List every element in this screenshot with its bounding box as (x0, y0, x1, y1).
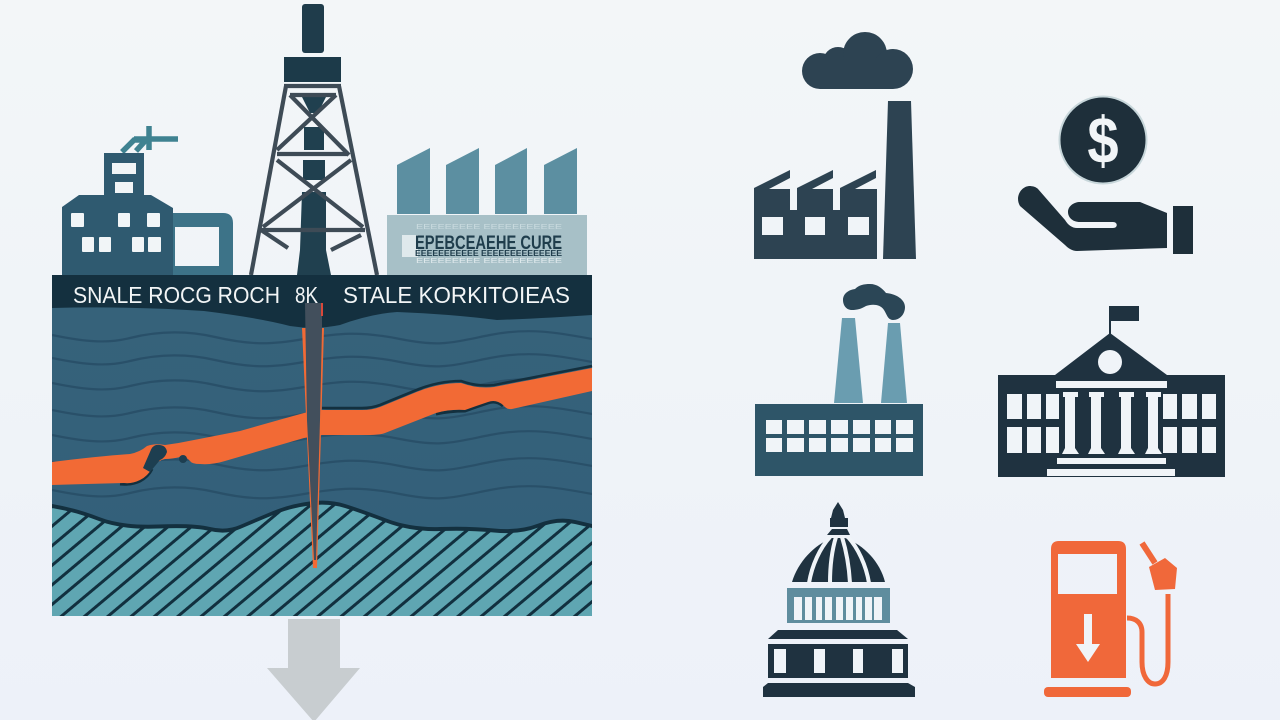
arrow: downward (267, 619, 360, 720)
smoke cloud (843, 284, 905, 320)
dome (792, 538, 885, 582)
seam rupture marks (143, 445, 187, 472)
connected tank (172, 213, 233, 275)
wellbore (302, 303, 324, 568)
cuff (1173, 206, 1193, 254)
factory sign text: EPEBCEAEHE CURE (415, 233, 562, 254)
drum windows (794, 597, 882, 620)
building teal pipes on roof (122, 126, 178, 152)
flag (1109, 306, 1139, 334)
refinery windows (766, 420, 913, 452)
hatched base layer (52, 501, 592, 616)
factory sign dark second row: EEEEEEEEEEE EEEEEEEEEEEEEE (415, 249, 563, 258)
factory sign lower text: EEEEEEEEE EEEEEEEEEEE (416, 258, 563, 265)
drum (787, 588, 890, 623)
icon: drilling derrick (251, 4, 377, 275)
surface band (52, 275, 592, 328)
building windows (71, 163, 161, 252)
band label left: SNALE ROCG ROCH (73, 282, 280, 308)
hall windows (774, 649, 903, 673)
icon: capitol dome (763, 502, 915, 697)
orange shale seam shadow (120, 366, 592, 484)
hose (1127, 594, 1168, 684)
icon: left processing building (62, 126, 233, 275)
smokestack (883, 101, 916, 259)
factory sign patch (402, 235, 418, 257)
icon: factory with smokestack and cloud (754, 32, 916, 259)
lower hall (768, 644, 908, 678)
icon: government building with flag (998, 306, 1225, 477)
coin (1060, 96, 1146, 184)
plinth (763, 683, 915, 697)
icon: orange fuel pump with down arrow (1044, 541, 1177, 697)
rock layers (52, 300, 592, 540)
chimneys (834, 318, 907, 403)
factory wall (387, 215, 587, 275)
strata wave lines (52, 331, 592, 498)
pump body (1051, 541, 1126, 678)
building windows (1007, 394, 1216, 453)
derrick top stack (302, 4, 324, 53)
factory body (754, 170, 877, 259)
derrick central column (297, 97, 331, 275)
nozzle (1142, 543, 1177, 590)
dome ribs (809, 537, 869, 583)
orange shale seam (52, 368, 592, 485)
lower roof (768, 630, 908, 639)
panel: shale rock cross-section (52, 275, 592, 616)
building body (62, 153, 173, 275)
saw-tooth roof blocks (397, 148, 577, 214)
icon: right factory with labelled wall (387, 148, 587, 275)
factory sign upper text: EEEEEEEEE EEEEEEEEEEE (416, 224, 563, 231)
down arrow (1076, 614, 1100, 662)
building body and pediment (998, 333, 1225, 477)
derrick lattice (251, 86, 377, 275)
derrick head (284, 57, 341, 82)
band label right: STALE KORKITOIEAS (343, 282, 570, 308)
icon: hand holding dollar coin (1018, 96, 1193, 254)
band label small mark: 8K (295, 282, 319, 308)
factory windows (762, 217, 869, 235)
hand (1018, 186, 1167, 251)
dollar sign: $ (1087, 104, 1119, 177)
spire and lantern (827, 502, 850, 535)
refinery block (755, 404, 923, 476)
pediment circle (1098, 350, 1122, 374)
pump base (1044, 687, 1131, 697)
cloud (802, 32, 913, 89)
entablature, columns and steps (1047, 381, 1175, 476)
icon: refinery with two chimneys (755, 284, 923, 476)
